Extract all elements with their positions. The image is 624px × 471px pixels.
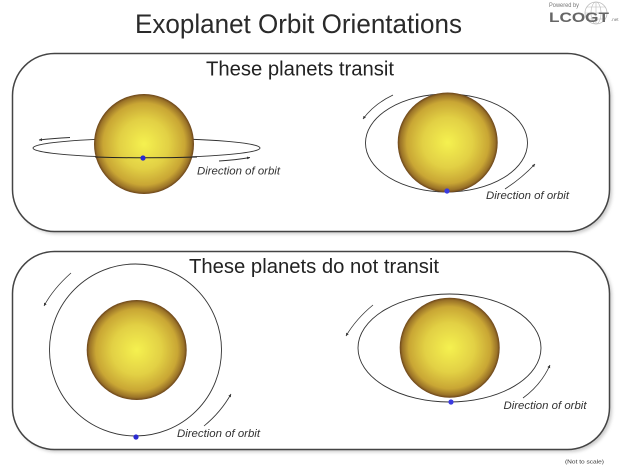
diagram: inclined orbit grazing star: Direction of orbit	[486, 190, 570, 202]
logo: Powered by LCOGT.net: LCOGT	[549, 9, 610, 25]
diagram: inclined orbit not crossing star: Direction of orbit	[504, 400, 587, 412]
note: not to scale: (Not to scale)	[565, 460, 604, 466]
diagram: face-on circular orbit	[44, 264, 261, 440]
logo: Powered by LCOGT.net: Powered by	[549, 3, 579, 9]
diagram: edge-on orbit behind and across star	[33, 94, 281, 194]
diagram: inclined orbit grazing star	[363, 92, 570, 202]
panel: these planets transit	[12, 54, 612, 234]
diagram: inclined orbit not crossing star	[346, 294, 587, 412]
heading: these planets transit: These planets transit	[206, 58, 394, 80]
diagram: face-on circular orbit: Direction of orbit	[177, 428, 261, 440]
logo: Powered by LCOGT.net	[549, 2, 619, 25]
heading: these planets do not transit: These planets do not transit	[189, 256, 439, 278]
title: Exoplanet Orbit Orientations	[135, 9, 462, 39]
diagram: edge-on orbit behind and across star: Direction of orbit	[197, 166, 281, 178]
logo: Powered by LCOGT.net: .net	[611, 17, 619, 22]
panel: these planets do not transit	[12, 252, 612, 452]
